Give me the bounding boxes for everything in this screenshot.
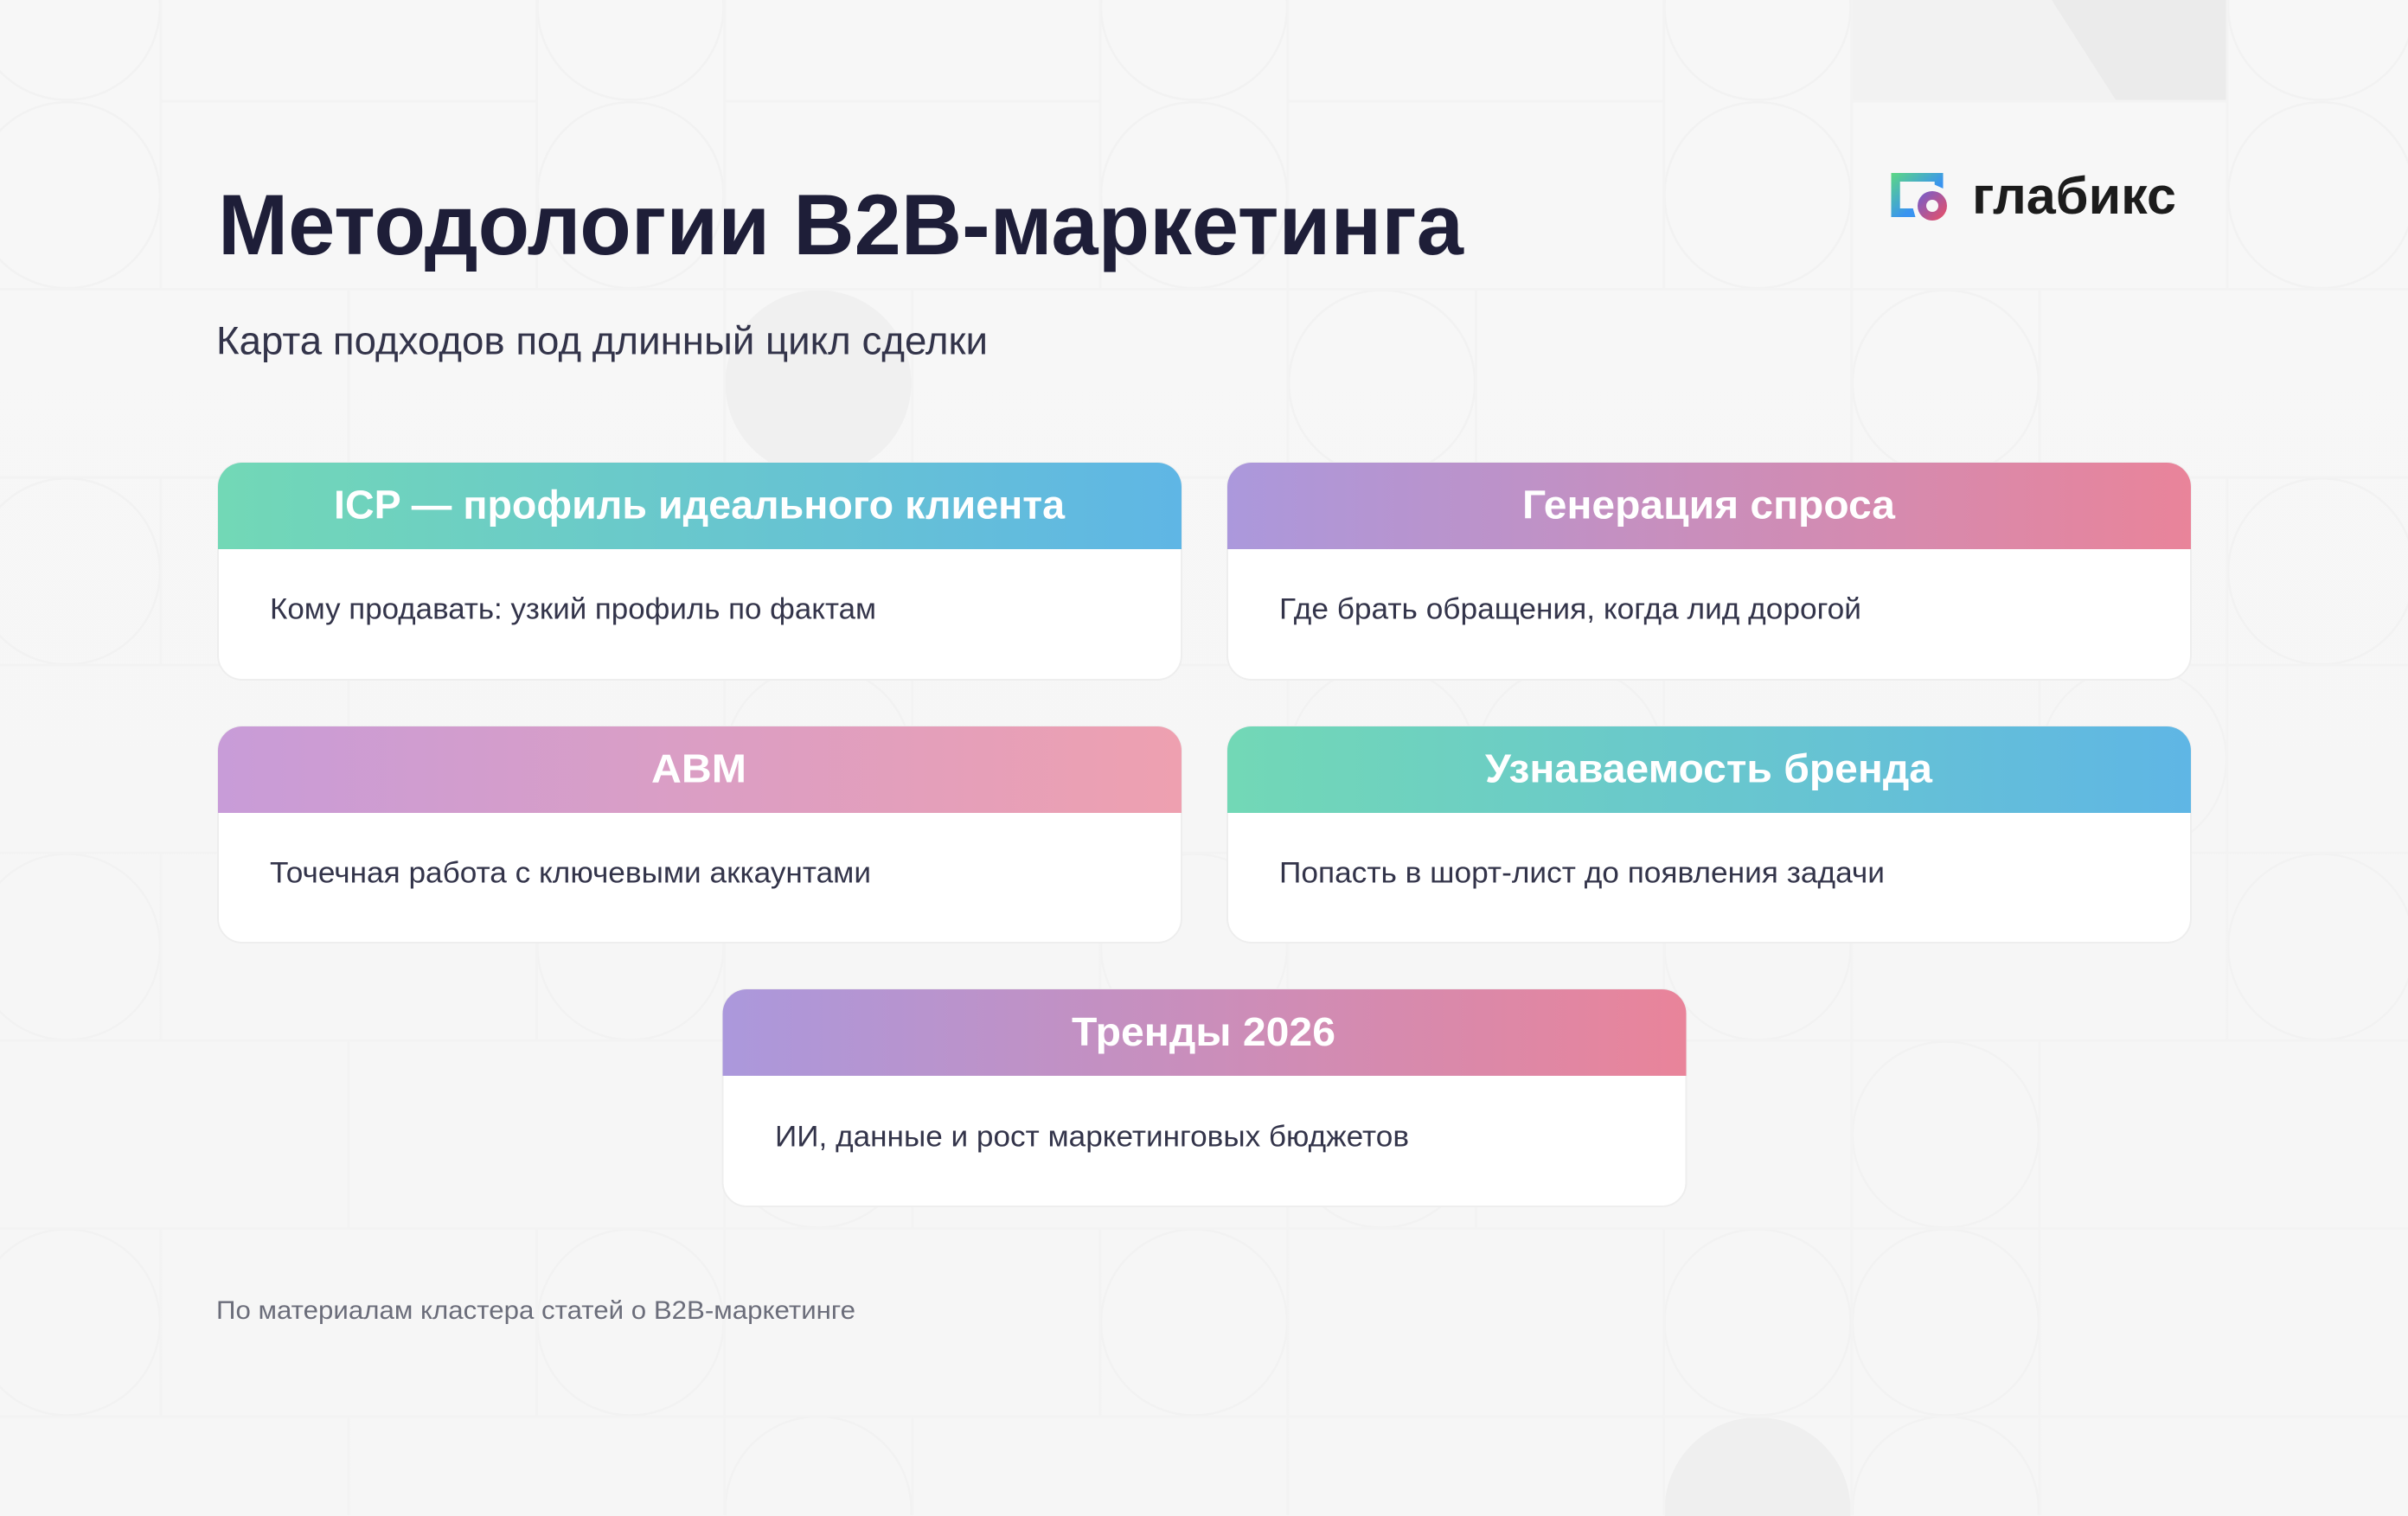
header: brand awareness bbox=[1227, 726, 2191, 813]
header: ICP bbox=[218, 463, 1182, 549]
footer source note: По материалам кластера статей о B2B-маркетинге bbox=[216, 1296, 855, 1325]
logo: glabix bbox=[1891, 167, 2176, 225]
heading: brand awareness: Узнаваемость бренда bbox=[1485, 745, 1932, 790]
heading: trends 2026: Тренды 2026 bbox=[1072, 1009, 1335, 1054]
title: Методологии B2B-маркетинга bbox=[218, 176, 1464, 272]
body text: brand awareness: Попасть в шорт-лист до появления задачи bbox=[1279, 856, 1885, 889]
panel: demand generation bbox=[1227, 463, 2191, 680]
panel: ABM bbox=[218, 726, 1182, 943]
body text: ABM: Точечная работа с ключевыми аккаунтами bbox=[270, 856, 871, 889]
panel: trends 2026 bbox=[723, 989, 1687, 1206]
header: ABM bbox=[218, 726, 1182, 813]
logo wordmark: глабикс bbox=[1972, 167, 2176, 225]
heading: demand generation: Генерация спроса bbox=[1522, 483, 1895, 528]
header: trends 2026 bbox=[723, 989, 1687, 1076]
heading: ICP: ICP — профиль идеального клиента bbox=[334, 483, 1065, 528]
body text: trends 2026: ИИ, данные и рост маркетинговых бюджетов bbox=[775, 1121, 1409, 1154]
heading: ABM: ABM bbox=[651, 745, 746, 790]
panel: brand awareness bbox=[1227, 726, 2191, 943]
header: demand generation bbox=[1227, 463, 2191, 549]
panel: ICP bbox=[218, 463, 1182, 680]
body text: demand generation: Где брать обращения, когда лид дорогой bbox=[1279, 593, 1861, 626]
subtitle: Карта подходов под длинный цикл сделки bbox=[216, 318, 988, 363]
icon: logo mark bbox=[1891, 173, 1947, 221]
body text: ICP: Кому продавать: узкий профиль по фактам bbox=[270, 593, 876, 626]
